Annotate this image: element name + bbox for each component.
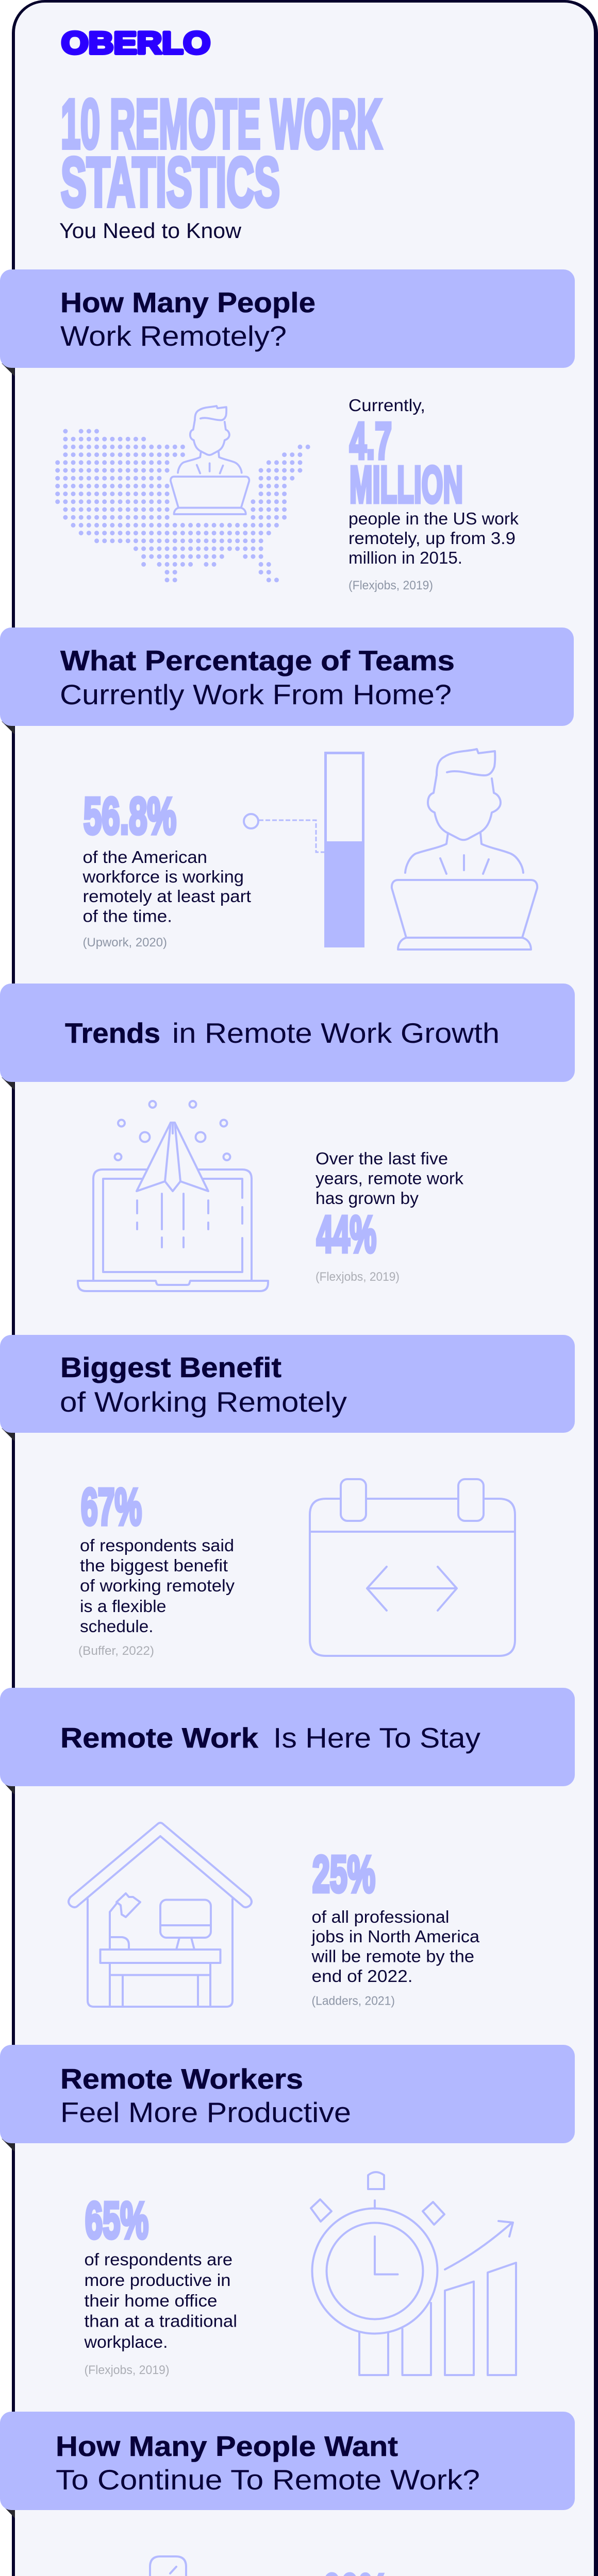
panel: biggest benefit of working remotely [0, 1335, 575, 1658]
icon: person at laptop [392, 749, 537, 950]
section banner: Is Here To Stay [273, 1722, 481, 1754]
stat: 67%: the biggest benefit [80, 1556, 228, 1575]
chart: progress bar with dashed callout [244, 753, 364, 947]
icon: person with laptop in armchair [83, 2556, 253, 2576]
section banner [0, 1335, 575, 1441]
section banner: Remote Work [60, 1722, 258, 1754]
title: You Need to Know [59, 218, 242, 243]
stat: 4.7 million: remotely, up from 3.9 [348, 529, 516, 548]
section banner: in Remote Work Growth [172, 1017, 500, 1049]
stat: 65%: (Flexjobs, 2019) [85, 2363, 169, 2377]
icon: dotted US map with remote worker [58, 406, 308, 580]
stat: 65%: than at a traditional [85, 2312, 237, 2331]
icon: paper plane launching from laptop [78, 1101, 268, 1291]
stat: 25% [311, 1845, 480, 2008]
stat: 44%: Over the last five [315, 1149, 448, 1168]
section banner [0, 2412, 575, 2518]
section banner: Feel More Productive [60, 2096, 351, 2128]
section banner: To Continue To Remote Work? [56, 2464, 480, 2496]
icon: clock with rising bars [311, 2172, 516, 2375]
stat: 56.8%: remotely at least part [82, 887, 251, 906]
section banner: What Percentage of Teams [60, 645, 455, 676]
stat: 25%: (Ladders, 2021) [311, 1994, 395, 2008]
stat: 4.7 million: MILLION [350, 456, 463, 514]
stat: 67%: (Buffer, 2022) [78, 1644, 154, 1658]
section banner: of Working Remotely [60, 1386, 347, 1418]
stat: 4.7 million: (Flexjobs, 2019) [348, 579, 433, 592]
icon: calendar with flexible arrows [310, 1479, 515, 1656]
panel: how many people want to continue remote work [0, 2412, 575, 2576]
section banner: Remote Workers [60, 2063, 303, 2095]
stat: 25%: end of 2022. [311, 1967, 412, 1986]
stat: 56.8%: workforce is working [82, 867, 244, 886]
stat: 4.7 million: 4.7 [350, 412, 392, 470]
stat: 4.7 million [348, 396, 519, 592]
stat: 56.8% [82, 787, 251, 950]
section banner [0, 1688, 575, 1794]
stat: 25%: of all professional [311, 1907, 450, 1926]
section banner: Trends [65, 1017, 160, 1049]
section banner [0, 628, 574, 734]
section banner: Biggest Benefit [60, 1351, 281, 1383]
stat: 44%: 44% [317, 1206, 376, 1263]
stat: 56.8%: of the American [82, 848, 207, 867]
title: STATISTICS [61, 143, 280, 221]
stat: 56.8%: 56.8% [84, 787, 176, 845]
stat: 67%: is a flexible [80, 1597, 166, 1616]
panel: remote workers feel more productive [0, 2045, 575, 2377]
section banner: Work Remotely? [60, 320, 287, 352]
stat: 44% [315, 1149, 463, 1284]
stat: 65%: more productive in [85, 2270, 231, 2290]
stat: 67%: of working remotely [80, 1576, 235, 1595]
stat: 25%: jobs in North America [311, 1927, 480, 1946]
stat: 56.8%: of the time. [82, 907, 172, 925]
stat: 56.8%: (Upwork, 2020) [82, 936, 167, 950]
stat: 67%: 67% [81, 1478, 142, 1536]
stat: 65%: 65% [85, 2192, 148, 2249]
stat: 65%: their home office [85, 2291, 218, 2310]
stat: 44%: years, remote work [315, 1168, 463, 1188]
stat: 67%: schedule. [80, 1617, 154, 1636]
stat: 44%: (Flexjobs, 2019) [315, 1270, 400, 1284]
section banner [0, 2045, 575, 2151]
panel: how many people work remotely [0, 269, 575, 592]
stat: 67%: of respondents said [80, 1536, 234, 1555]
panel: trends in remote work growth [0, 984, 575, 1291]
section banner: How Many People Want [56, 2430, 398, 2462]
stat: 4.7 million: people in the US work [348, 509, 519, 528]
panel: percentage of teams working from home [0, 628, 574, 950]
icon: house with desk [69, 1823, 252, 2007]
stat: 65%: of respondents are [85, 2250, 232, 2269]
logo: OBERLO [61, 26, 210, 60]
stat: 65%: workplace. [84, 2332, 168, 2351]
section banner: Currently Work From Home? [60, 679, 452, 710]
section banner: How Many People [60, 286, 315, 318]
stat: 25%: will be remote by the [311, 1947, 474, 1966]
stat: 67% [78, 1478, 235, 1658]
stat: 25%: 25% [312, 1845, 375, 1903]
stat: 65% [84, 2192, 237, 2377]
stat: 4.7 million: Currently, [348, 396, 425, 415]
section banner [0, 269, 575, 376]
stat: 4.7 million: million in 2015. [348, 548, 462, 567]
section banner [0, 984, 575, 1090]
panel: remote work is here to stay [0, 1688, 575, 2008]
title [59, 85, 382, 243]
stat: 44%: has grown by [315, 1189, 419, 1208]
